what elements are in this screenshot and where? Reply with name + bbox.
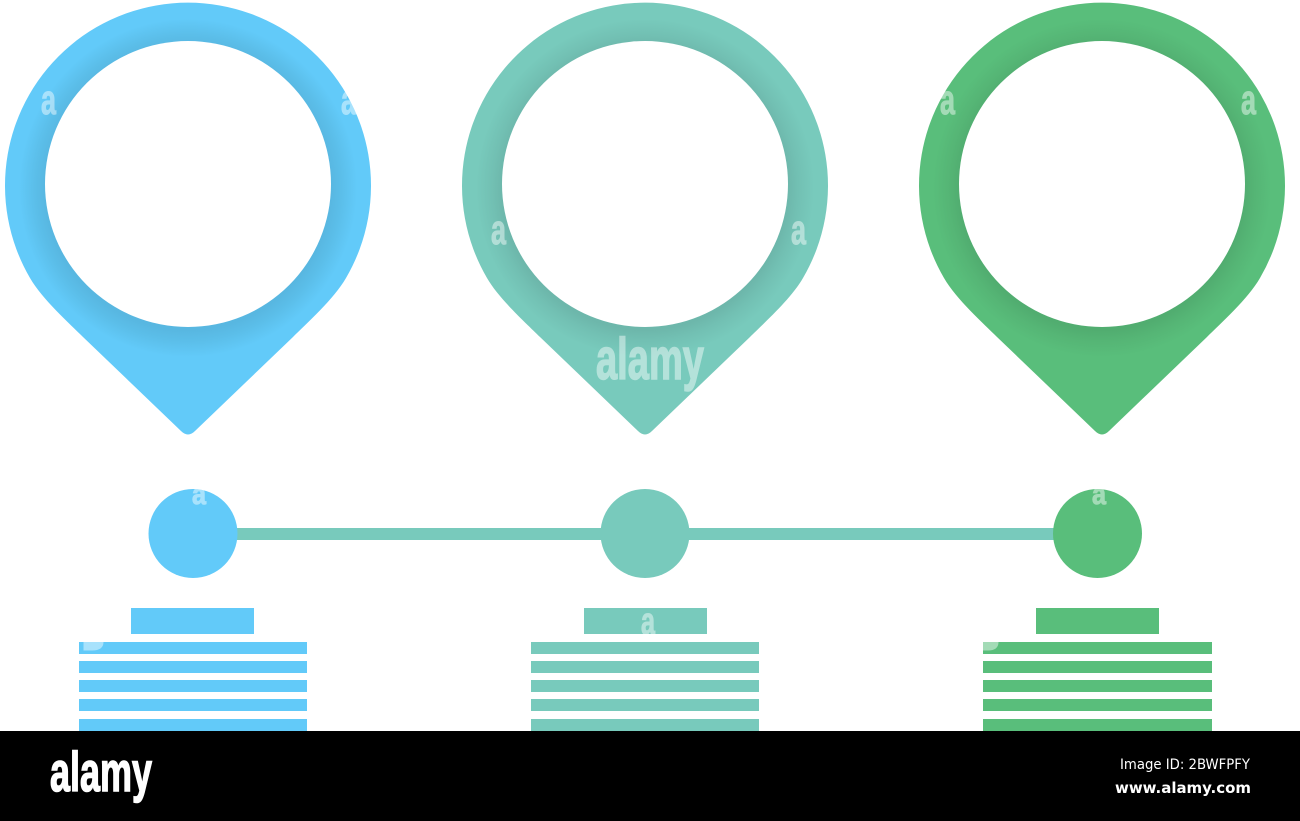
timeline node: blue	[148, 489, 238, 578]
pin: blue	[5, 3, 371, 434]
watermark: a	[41, 76, 56, 123]
pin: green	[919, 3, 1285, 434]
watermark: a	[491, 206, 506, 253]
watermark: a	[341, 76, 356, 123]
watermark: a	[1092, 478, 1106, 511]
website: www.alamy.com	[1115, 779, 1251, 797]
image id: Image ID: 2BWFPFY	[1120, 757, 1250, 773]
pin: teal	[462, 3, 828, 434]
watermark: a	[1241, 76, 1256, 123]
timeline connector	[236, 528, 1056, 540]
watermark	[41, 76, 1256, 650]
text placeholder: blue	[79, 608, 307, 731]
timeline node: green	[1053, 489, 1142, 578]
watermark: a	[641, 601, 656, 643]
footer logo: alamy	[50, 740, 152, 803]
watermark: a	[791, 206, 806, 253]
watermark: a	[192, 478, 206, 511]
text placeholder: teal	[531, 608, 759, 731]
footer bar	[0, 731, 1300, 821]
watermark: alamy	[596, 327, 704, 392]
watermark: a	[940, 76, 955, 123]
timeline node: teal	[600, 489, 690, 578]
text placeholder: green	[983, 608, 1212, 731]
